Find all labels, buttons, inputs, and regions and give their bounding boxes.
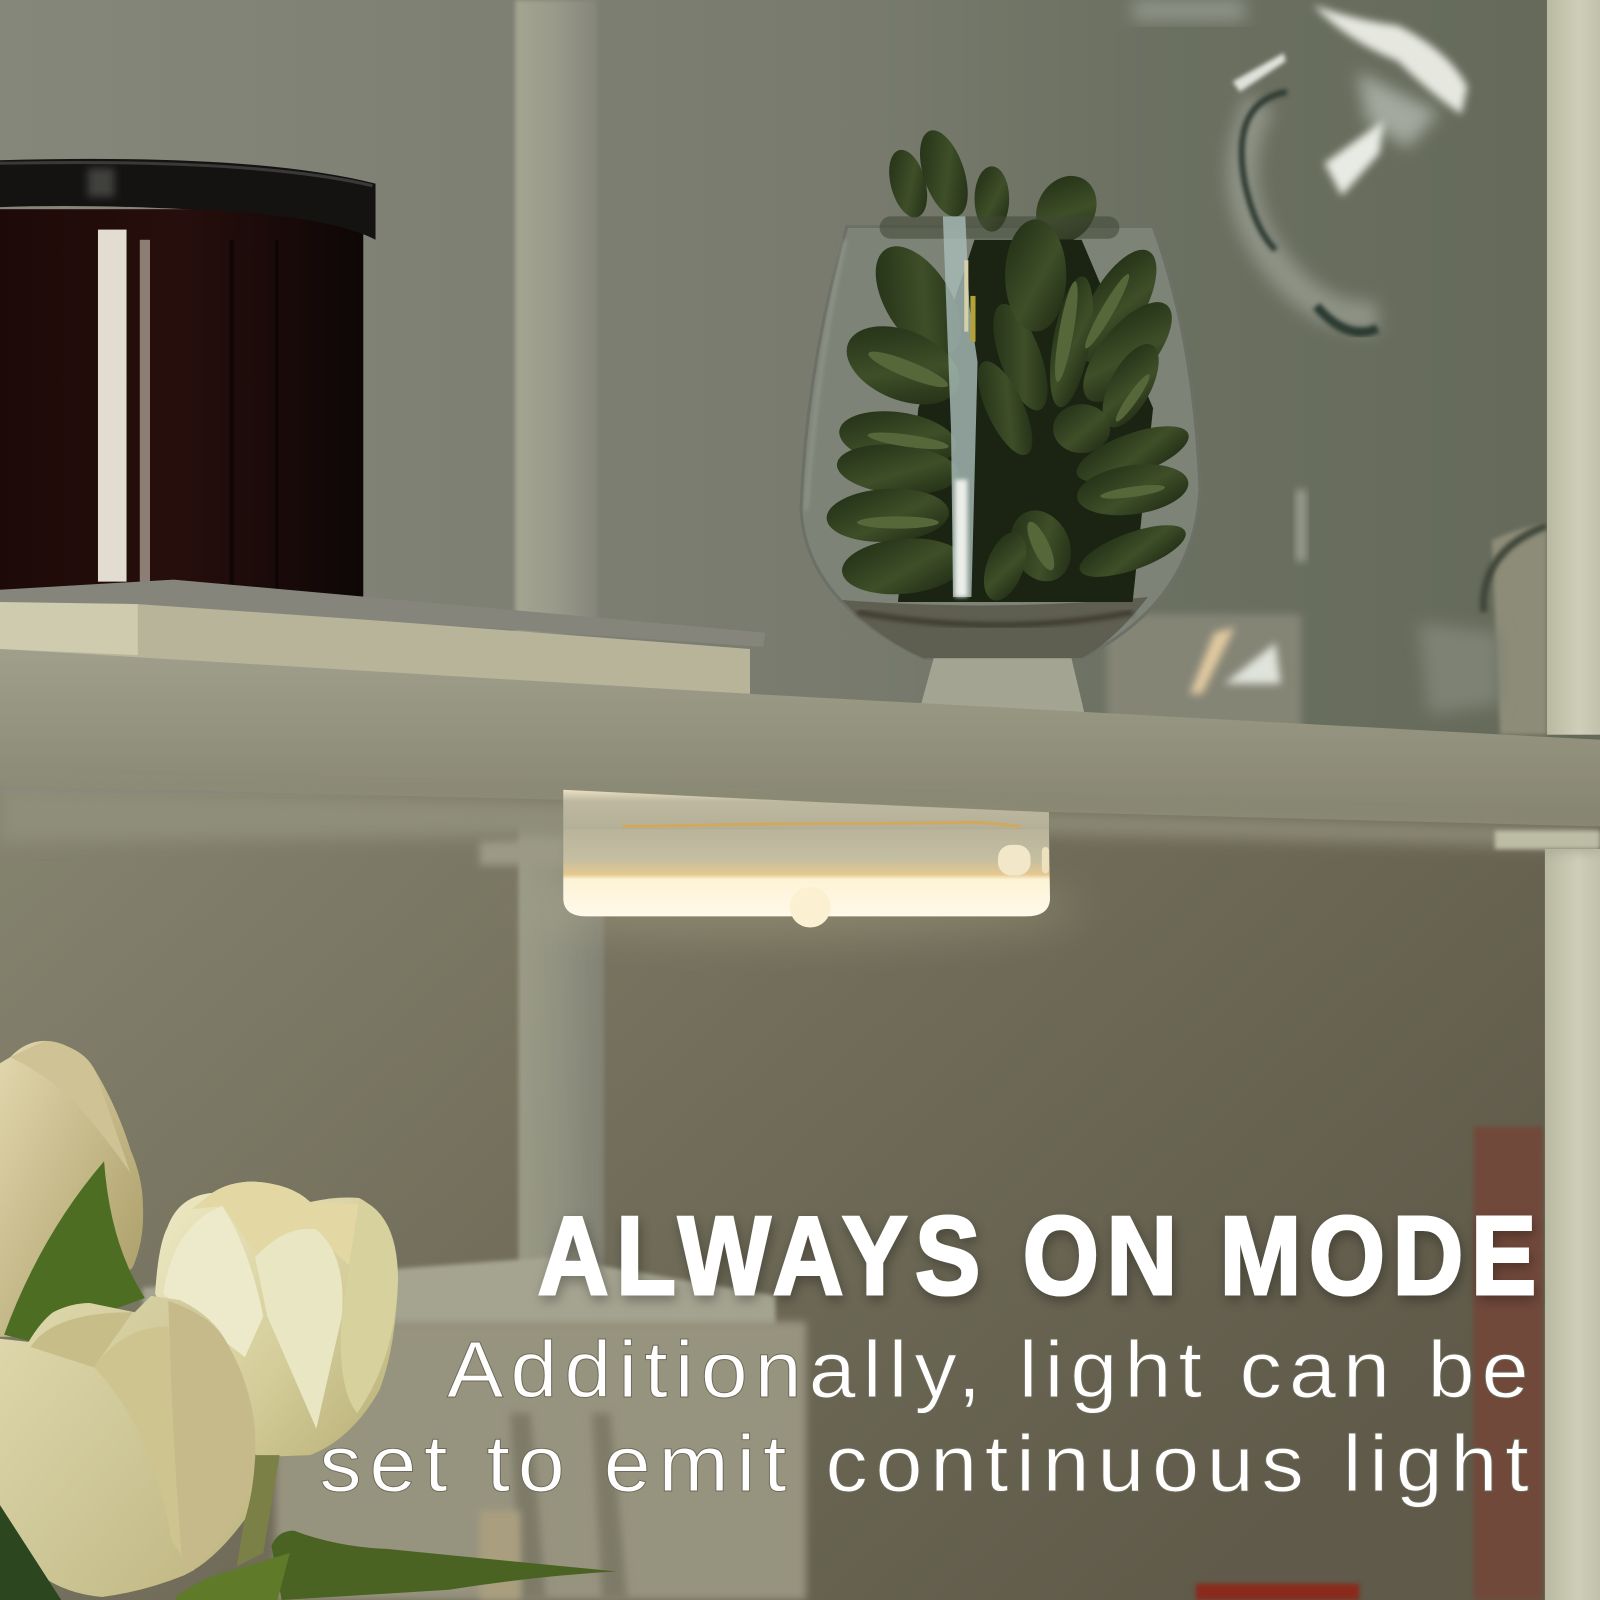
right white post xyxy=(1545,0,1600,1600)
puck light xyxy=(563,790,1050,928)
blurred glass carafe xyxy=(1107,0,1547,735)
background red book xyxy=(1196,1127,1543,1600)
front tulip xyxy=(0,1296,255,1597)
light glow xyxy=(531,878,1082,939)
sand layer xyxy=(842,597,1148,658)
tulips xyxy=(0,1041,616,1600)
glass reflection xyxy=(943,216,978,597)
sensor windows xyxy=(998,845,1031,876)
green leaf xyxy=(4,1161,145,1341)
middle tulip xyxy=(155,1182,398,1457)
succulent leaves xyxy=(825,124,1195,606)
shelf xyxy=(0,649,1600,865)
stem xyxy=(237,1455,280,1566)
stem base xyxy=(918,658,1085,714)
blurred background posts xyxy=(515,0,604,1276)
book on shelf xyxy=(0,580,765,694)
body text: Additionally, light can be xyxy=(447,1326,1529,1414)
lower leaves xyxy=(0,1505,61,1600)
motion sensor xyxy=(790,887,831,928)
glass with succulent xyxy=(801,124,1200,714)
background white books xyxy=(143,1257,806,1600)
dark jar with lid xyxy=(0,159,376,599)
heading: ALWAYS ON MODE xyxy=(538,1194,1536,1318)
body text xyxy=(319,1326,1529,1508)
back tulip xyxy=(0,1041,143,1337)
body text: set to emit continuous light xyxy=(319,1420,1529,1508)
